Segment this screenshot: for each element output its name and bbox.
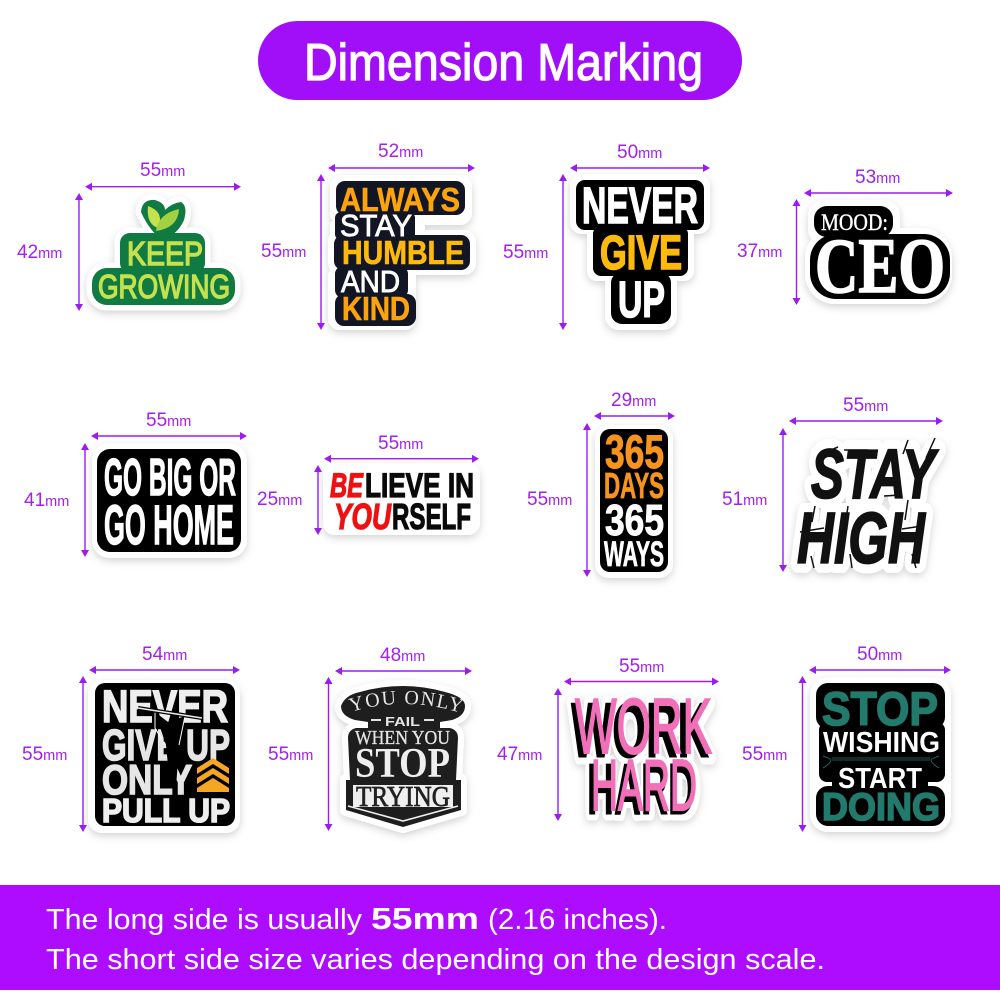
sticker: keep growing: KEEP (127, 235, 203, 272)
sticker: 365 days 365 ways: DAYS (604, 465, 664, 506)
sticker: work hard: HARD (591, 746, 697, 826)
sticker: work hard: WORK (571, 686, 712, 774)
sticker: never give up only pull up: ONLY (102, 756, 192, 803)
sticker: believe in yourself: BE (330, 467, 364, 505)
dimensions: never give up (503, 142, 710, 330)
dimensions: 365 days 365 ways: 55mm (527, 489, 572, 510)
footer band: 55mm (371, 901, 479, 936)
footer band: (2.16 inches). (488, 904, 667, 936)
sticker: mood ceo: CEO (815, 222, 945, 309)
sticker: stop wishing start doing: WISHING (823, 727, 940, 759)
sticker: stop wishing start doing: START (838, 763, 922, 795)
sticker: keep growing (92, 200, 235, 305)
dimensions: never give up only pull up: 55mm (22, 744, 67, 765)
dimensions: work hard: 47mm (497, 744, 542, 765)
sticker: go big or go home: GO HOME (104, 493, 234, 556)
panel: trying banner: TRYING (356, 781, 450, 813)
dimensions: stay high (722, 395, 943, 572)
icon: pull-up figure (138, 708, 202, 788)
sticker: stay high: STAY (811, 435, 939, 513)
dimensions: believe in yourself: 25mm (257, 489, 302, 510)
dimensions: keep growing: 42mm (17, 242, 62, 263)
sticker: never give up only pull up: PULL UP (102, 792, 230, 829)
dimensions: 365 days 365 ways: 29mm (611, 390, 656, 411)
dimensions: always stay humble and kind (261, 141, 475, 330)
title pill: Dimension Marking (304, 34, 703, 92)
dimensions: work hard (497, 656, 719, 821)
sticker: work hard: HARD (587, 750, 695, 830)
dimensions: mood ceo (737, 167, 953, 305)
footer band: The short side size varies depending on the design scale. (46, 944, 825, 976)
dimensions: go big or go home: 55mm (146, 410, 191, 431)
dimensions: stop wishing start doing: 55mm (742, 744, 787, 765)
dimensions: 365 days 365 ways (527, 390, 675, 577)
icon: chevrons (197, 758, 229, 792)
dimensions: believe in yourself: 55mm (378, 433, 423, 454)
sticker: you only fail when you stop trying: FAIL (385, 714, 420, 729)
sticker: you only fail when you stop trying (332, 680, 474, 838)
dimensions: you only fail when you stop trying: 55mm (268, 744, 313, 765)
dimensions: never give up only pull up (22, 644, 240, 832)
sticker: never give up only pull up: NEVER (102, 681, 228, 732)
sticker: mood ceo (805, 200, 952, 309)
sticker: never give up: NEVER (582, 177, 698, 234)
dimensions: keep growing: 55mm (140, 160, 185, 181)
dimensions: go big or go home: 41mm (24, 490, 69, 511)
sticker: keep growing: GROWING (98, 268, 230, 305)
sticker: mood ceo: MOOD: (821, 210, 888, 235)
sticker: never give up (570, 174, 710, 330)
dimensions: go big or go home (24, 410, 247, 557)
dimensions: you only fail when you stop trying: 48mm (380, 645, 425, 666)
sticker: never give up only pull up (88, 680, 240, 833)
sticker: never give up: GIVE (600, 227, 682, 280)
sticker: believe in yourself: RSELF (392, 496, 471, 537)
dimensions: mood ceo: 37mm (737, 241, 782, 262)
dimensions: never give up: 55mm (503, 242, 548, 263)
sticker: stay high (797, 435, 939, 579)
sticker: 365 days 365 ways: 365 (605, 425, 664, 478)
sticker: stay high: HIGH (797, 499, 926, 579)
sticker: you only fail when you stop trying: STOP (355, 741, 450, 787)
sticker: stop wishing start doing (810, 677, 951, 832)
sticker: always stay humble and kind: KIND (342, 290, 410, 327)
dimensions: believe in yourself (257, 433, 479, 535)
sticker: always stay humble and kind: HUMBLE (342, 234, 464, 271)
sticker: stop wishing start doing: STOP (822, 682, 938, 735)
sticker: believe in yourself: LIEVE IN (365, 467, 474, 505)
title pill (258, 21, 742, 100)
sticker: always stay humble and kind: ALWAYS (340, 181, 460, 218)
sticker: stay high: HIGH (797, 499, 926, 579)
sticker: never give up only pull up: GIVE UP (102, 721, 230, 770)
dimensions: always stay humble and kind: 52mm (378, 141, 423, 162)
sticker: 365 days 365 ways (595, 425, 673, 578)
sticker: 365 days 365 ways: 365 (605, 496, 664, 545)
dimensions: stay high: 51mm (722, 489, 767, 510)
dimensions: never give up only pull up: 54mm (142, 644, 187, 665)
dimensions: you only fail when you stop trying (268, 645, 472, 831)
sticker: always stay humble and kind (328, 175, 476, 330)
sticker: stay high: STAY (811, 435, 939, 513)
sticker: never give up: UP (618, 271, 665, 328)
sticker: work hard (571, 682, 712, 830)
sticker: you only fail when you stop trying: WHEN YOU (355, 727, 450, 749)
sticker: you only fail when you stop trying: YOU ONLY (348, 691, 464, 712)
dimensions: stop wishing start doing (742, 644, 951, 832)
sticker: work hard: HARD (587, 749, 698, 829)
dimensions: work hard: 55mm (619, 656, 664, 677)
sticker: go big or go home: GO BIG OR (104, 449, 236, 507)
sticker: stop wishing start doing: DOING (822, 786, 940, 829)
sticker: believe in yourself: YOU (334, 496, 392, 537)
footer band (0, 885, 1000, 990)
dimensions: keep growing (17, 160, 241, 311)
sticker: always stay humble and kind: STAY (340, 208, 412, 243)
dimensions: always stay humble and kind: 55mm (261, 241, 306, 262)
sticker: believe in yourself (323, 463, 480, 537)
sticker: 365 days 365 ways: WAYS (604, 535, 664, 574)
sticker: work hard: WORK (575, 682, 712, 770)
sticker: go big or go home (92, 443, 247, 558)
footer band: The long side is usually (46, 904, 363, 936)
dimensions: stay high: 55mm (843, 395, 888, 416)
dimensions: mood ceo: 53mm (855, 167, 900, 188)
sticker: always stay humble and kind: AND (341, 264, 400, 299)
sticker: work hard: WORK (571, 686, 709, 774)
dimensions: stop wishing start doing: 50mm (857, 644, 902, 665)
dimensions: never give up: 50mm (617, 142, 662, 163)
